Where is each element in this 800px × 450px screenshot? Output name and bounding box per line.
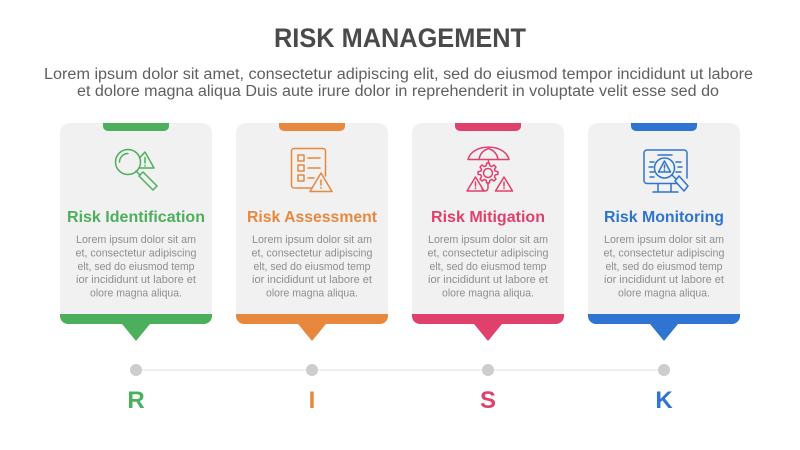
card background — [412, 123, 564, 314]
card body text — [76, 234, 196, 300]
card body text — [252, 234, 372, 300]
timeline dot 1 — [130, 364, 142, 376]
card heading: Risk Identification — [67, 209, 205, 226]
card body text: Lorem ipsum dolor sit am — [604, 234, 724, 246]
card body text: et, consectetur adipiscing — [428, 248, 548, 260]
icon: umbrella, gear and warnings — [467, 147, 512, 191]
card background — [588, 123, 740, 314]
panel: risk identification — [60, 123, 212, 341]
intro text: Lorem ipsum dolor sit amet, consectetur adipiscing elit, sed do eiusmod tempor incididunt ut labore — [44, 66, 753, 83]
card body text: elt, sed do eiusmod temp — [606, 261, 722, 273]
card heading: Risk Assessment — [247, 209, 377, 226]
panel: risk mitigation — [412, 123, 564, 341]
card body text: olore magna aliqua. — [618, 288, 710, 300]
timeline line — [136, 369, 664, 371]
card heading: Risk Mitigation — [431, 209, 545, 226]
letter I: I — [309, 387, 315, 414]
card body text: elt, sed do eiusmod temp — [78, 261, 194, 273]
card body text: Lorem ipsum dolor sit am — [252, 234, 372, 246]
panel: risk assessment — [236, 123, 388, 341]
card body text: olore magna aliqua. — [90, 288, 182, 300]
timeline dot 3 — [482, 364, 494, 376]
card body text: Lorem ipsum dolor sit am — [428, 234, 548, 246]
card body text: ior incididunt ut labore et — [252, 274, 372, 286]
top tab — [631, 123, 697, 131]
bottom bar with pointer — [588, 314, 740, 341]
top tab — [279, 123, 345, 131]
card body text: et, consectetur adipiscing — [604, 248, 724, 260]
letter S: S — [480, 387, 496, 414]
card body text — [604, 234, 724, 300]
card body text: et, consectetur adipiscing — [76, 248, 196, 260]
card background — [60, 123, 212, 314]
bottom bar with pointer — [60, 314, 212, 341]
card heading: Risk Monitoring — [604, 209, 724, 226]
intro text — [44, 66, 753, 100]
card body text: ior incididunt ut labore et — [604, 274, 724, 286]
card background — [236, 123, 388, 314]
bottom bar with pointer — [412, 314, 564, 341]
letter K: K — [655, 387, 673, 414]
card body text: et, consectetur adipiscing — [252, 248, 372, 260]
icon: checklist with warning — [292, 148, 332, 192]
icon: monitor with magnifier — [644, 150, 688, 192]
card body text: elt, sed do eiusmod temp — [430, 261, 546, 273]
timeline dot 2 — [306, 364, 318, 376]
top tab — [455, 123, 521, 131]
top tab — [103, 123, 169, 131]
card body text: ior incididunt ut labore et — [428, 274, 548, 286]
card body text: olore magna aliqua. — [442, 288, 534, 300]
timeline dot 4 — [658, 364, 670, 376]
card body text: Lorem ipsum dolor sit am — [76, 234, 196, 246]
card body text: olore magna aliqua. — [266, 288, 358, 300]
card body text — [428, 234, 548, 300]
card body text: elt, sed do eiusmod temp — [254, 261, 370, 273]
panel: risk monitoring — [588, 123, 740, 341]
title: RISK MANAGEMENT — [274, 23, 526, 53]
intro text: et dolore magna aliqua Duis aute irure dolor in reprehenderit in voluptate velit esse sed do — [77, 83, 719, 100]
letter R: R — [127, 387, 145, 414]
bottom bar with pointer — [236, 314, 388, 341]
icon: magnifier with warning — [116, 150, 157, 190]
card body text: ior incididunt ut labore et — [76, 274, 196, 286]
